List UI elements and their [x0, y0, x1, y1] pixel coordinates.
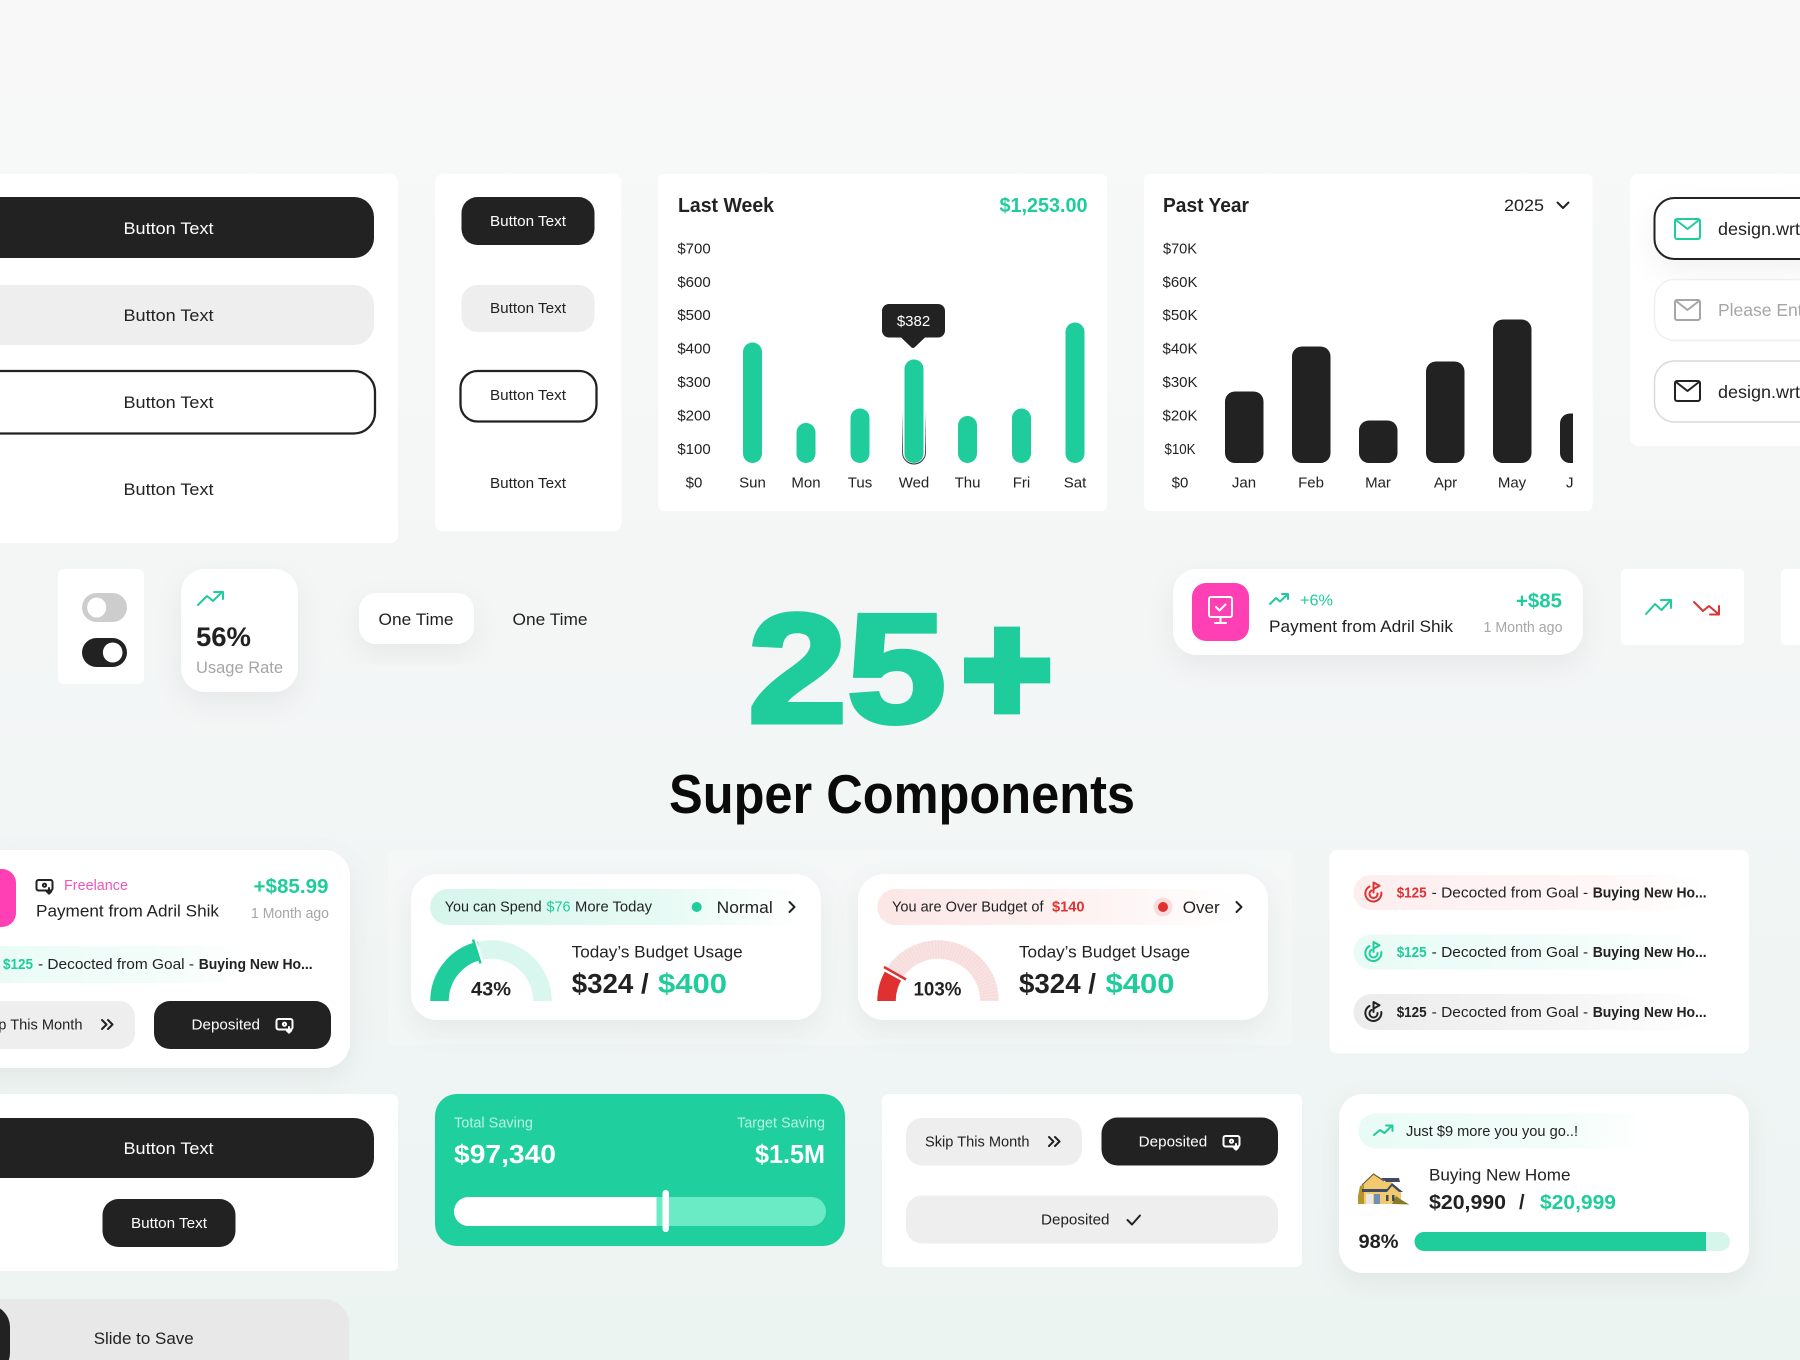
icon: trend down — [1694, 602, 1719, 614]
x axis labels: Fri — [1013, 474, 1030, 492]
input: placeholder — [1654, 280, 1800, 340]
slider label: Slide to Save — [94, 1329, 194, 1348]
value: target: $1.5M — [755, 1139, 825, 1169]
highlight outline on Wednesday bar — [902, 357, 926, 464]
button: deposited: Deposited — [1139, 1134, 1207, 1150]
status over — [1154, 898, 1242, 917]
y axis labels: $70K — [1163, 240, 1197, 258]
y axis labels: $200 — [677, 408, 711, 424]
card: freelance payment — [0, 850, 350, 1068]
card: usage rate — [181, 569, 298, 692]
chart title: Last Week — [678, 195, 775, 217]
button: dark large: Button Text — [124, 1139, 214, 1158]
faint backdrop: budget cards — [388, 850, 1292, 1045]
goal current: $20,990 — [1429, 1192, 1506, 1214]
tab: active — [359, 593, 474, 644]
button: dark small — [102, 1199, 236, 1247]
goal target: $20,999 — [1540, 1192, 1616, 1214]
goal row: red: Buying New Ho... — [1593, 884, 1707, 902]
time: 1 Month ago — [251, 905, 329, 922]
big number — [748, 582, 1052, 755]
button: grey small: Button Text — [490, 301, 566, 317]
button: deposited — [1102, 1118, 1278, 1166]
panel: toggles — [58, 569, 144, 684]
status pill — [430, 889, 805, 925]
goal row: grey — [1354, 994, 1707, 1030]
input: filled — [1654, 361, 1800, 422]
button: outline small — [460, 371, 596, 422]
usage value: 56% — [196, 622, 251, 652]
goal title: Buying New Home — [1429, 1166, 1570, 1184]
heading: Super Components — [669, 763, 1135, 825]
goal row: green: - Decocted from Goal - — [1432, 944, 1588, 961]
toggle off — [82, 593, 127, 622]
panel: past year chart — [1144, 174, 1598, 511]
x axis labels: Tus — [848, 474, 872, 492]
usage label: Usage Rate — [196, 658, 283, 677]
goal notice row: Buying New Ho... — [199, 956, 313, 973]
input: focused: design.wrt — [1718, 219, 1800, 239]
progress percent: 98% — [1358, 1232, 1399, 1253]
notice text: Just $9 more you you go..! — [1406, 1123, 1578, 1140]
card: budget over — [858, 874, 1268, 1020]
status normal: Normal — [717, 898, 773, 917]
pill message — [445, 898, 652, 916]
card: payment — [1173, 569, 1583, 655]
budget amount: $324 / — [1019, 968, 1096, 999]
y axis labels: $10K — [1164, 441, 1196, 458]
button: dark large: Button Text — [124, 219, 214, 238]
budget amount — [572, 968, 727, 999]
gauge 103% — [884, 950, 990, 1001]
icon: money — [36, 880, 52, 894]
y axis labels: $600 — [677, 274, 711, 291]
chart title: Past Year — [1163, 195, 1249, 217]
y axis labels: $300 — [677, 374, 711, 391]
y axis labels: $0 — [1172, 474, 1188, 492]
y axis labels: $500 — [677, 307, 711, 324]
panel: email inputs — [1630, 174, 1800, 446]
x axis labels: Sun — [739, 474, 766, 492]
icon: trend up — [1646, 600, 1671, 614]
description: Payment from Adril Shik — [36, 902, 219, 920]
card: buying new home — [1339, 1094, 1749, 1273]
tooltip — [882, 304, 945, 348]
panel: last week chart — [658, 174, 1107, 511]
button: deposited — [154, 1001, 331, 1049]
button: skip — [906, 1118, 1082, 1166]
panel: small buttons — [435, 174, 622, 531]
big plus sign: + — [962, 582, 1052, 755]
icon: pink tile — [0, 869, 16, 927]
y axis labels: $700 — [677, 240, 711, 258]
amount: +$85 — [1516, 590, 1562, 612]
value: total saving: $97,340 — [454, 1139, 556, 1169]
label: target saving: Target Saving — [737, 1114, 825, 1132]
x axis labels: Feb — [1298, 474, 1324, 492]
panel: bottom buttons — [0, 1094, 398, 1271]
x axis labels: Thu — [955, 474, 980, 492]
x axis labels — [1232, 476, 1572, 490]
separator: / — [1519, 1192, 1525, 1214]
button: outline large: Button Text — [124, 393, 214, 412]
panel: action buttons — [882, 1094, 1302, 1267]
button: text small: Button Text — [490, 476, 566, 492]
panel: trend icons — [1621, 569, 1744, 645]
toggle on — [82, 638, 127, 667]
year selector: 2025 — [1504, 196, 1544, 215]
x axis labels: May — [1498, 474, 1527, 492]
goal notice row: - Decocted from Goal - — [38, 956, 194, 973]
goal row: red: - Decocted from Goal - — [1432, 884, 1588, 902]
panel: goal notices — [1330, 850, 1749, 1054]
budget amount: $400 — [658, 968, 727, 999]
input: focused — [1654, 198, 1800, 259]
big number: 25 — [748, 582, 946, 755]
budget label: Today’s Budget Usage — [1019, 942, 1190, 962]
bars: weekly spending — [743, 322, 1084, 463]
input: filled: design.wrt — [1718, 382, 1800, 402]
button: deposited check: Deposited — [1041, 1212, 1110, 1228]
year selector — [1504, 196, 1568, 215]
card: saving progress — [435, 1094, 845, 1246]
tabs: one time — [340, 575, 625, 665]
goal row: green — [1354, 934, 1707, 970]
x axis labels: Mar — [1365, 474, 1391, 492]
y axis labels: $40K — [1162, 340, 1198, 358]
tab: inactive: One Time — [512, 610, 588, 629]
chart total: $1,253.00 — [1000, 195, 1088, 217]
y axis labels: $20K — [1162, 408, 1198, 424]
goal notice row: $125 — [3, 956, 33, 973]
button: outline small: Button Text — [490, 388, 566, 404]
button: grey large: Button Text — [124, 306, 214, 325]
gauge 43%: 43% — [471, 980, 511, 1000]
change percent: +6% — [1300, 592, 1333, 610]
bars: monthly totals — [1225, 320, 1598, 463]
button: skip: Skip This Month — [925, 1134, 1030, 1150]
label: total saving: Total Saving — [454, 1114, 533, 1132]
panel: partial right edge — [1781, 569, 1800, 645]
goal row: grey: - Decocted from Goal - — [1432, 1004, 1588, 1021]
icon: pink monitor — [1192, 583, 1249, 641]
icon: trend up — [198, 592, 223, 605]
status normal — [692, 898, 794, 917]
x axis labels — [739, 474, 1087, 492]
progress bar — [1414, 1232, 1730, 1251]
slider: slide to save — [0, 1299, 350, 1360]
goal row: green: $125 — [1397, 944, 1427, 961]
budget label: Today’s Budget Usage — [572, 942, 743, 962]
pill message: More Today — [575, 898, 652, 916]
button: grey large — [0, 285, 374, 345]
pill message: You are Over Budget of — [892, 898, 1044, 916]
button: dark large — [0, 197, 374, 258]
button: skip — [0, 1001, 135, 1049]
time: 1 Month ago — [1484, 619, 1562, 636]
icon: house — [1358, 1174, 1409, 1204]
y axis labels: $30K — [1162, 374, 1198, 391]
x axis labels: Jan — [1232, 474, 1256, 492]
payment description: Payment from Adril Shik — [1269, 617, 1453, 636]
gauge 43% — [440, 940, 542, 1001]
button: dark large — [0, 1118, 374, 1178]
y axis labels: $50K — [1162, 307, 1198, 324]
x axis labels: Apr — [1434, 474, 1457, 492]
gauge 103%: 103% — [914, 980, 962, 1000]
notice pill — [1358, 1114, 1648, 1148]
slider thumb — [0, 1305, 10, 1360]
goal row: red: $125 — [1397, 884, 1427, 902]
amount: +$85.99 — [254, 876, 328, 898]
x axis labels: Wed — [899, 474, 929, 492]
goal row: red — [1354, 875, 1707, 910]
status over: Over — [1183, 898, 1220, 917]
goal row: grey: $125 — [1397, 1004, 1427, 1021]
button: deposited: Deposited — [192, 1016, 260, 1034]
x axis labels: Jun — [1566, 474, 1590, 492]
tooltip: $382 — [897, 313, 930, 330]
y axis labels — [677, 240, 711, 492]
budget amount: $324 / — [572, 968, 649, 999]
icon: trend up — [1374, 1126, 1392, 1135]
icon: trend up — [1270, 594, 1288, 604]
x axis labels: Sat — [1064, 474, 1087, 492]
budget amount: $400 — [1106, 968, 1174, 999]
pill message: $76 — [546, 898, 570, 916]
button: dark small: Button Text — [131, 1216, 207, 1232]
pill message: You can Spend — [445, 898, 542, 916]
tab: active: One Time — [378, 610, 454, 629]
goal row: green: Buying New Ho... — [1593, 944, 1707, 961]
button: outline large — [0, 371, 375, 434]
x axis labels: Mon — [791, 474, 821, 492]
y axis labels — [1162, 240, 1198, 492]
y axis labels: $0 — [686, 474, 702, 492]
button: dark small: Button Text — [490, 214, 566, 230]
status pill — [877, 889, 1237, 925]
category label: Freelance — [64, 877, 128, 894]
button: grey small — [462, 285, 594, 332]
progress track — [454, 1190, 826, 1232]
button: text large: Button Text — [124, 480, 214, 499]
pill message: $140 — [1052, 898, 1084, 916]
button: dark small — [462, 197, 594, 245]
goal row: grey: Buying New Ho... — [1593, 1004, 1707, 1021]
panel: large buttons — [0, 174, 398, 543]
button: deposited check — [906, 1196, 1278, 1244]
budget amount — [1019, 968, 1174, 999]
goal notice row — [0, 946, 313, 983]
y axis labels: $60K — [1162, 274, 1198, 291]
y axis labels: $400 — [677, 340, 711, 358]
y axis labels: $100 — [677, 441, 711, 458]
card: budget normal — [411, 874, 821, 1020]
